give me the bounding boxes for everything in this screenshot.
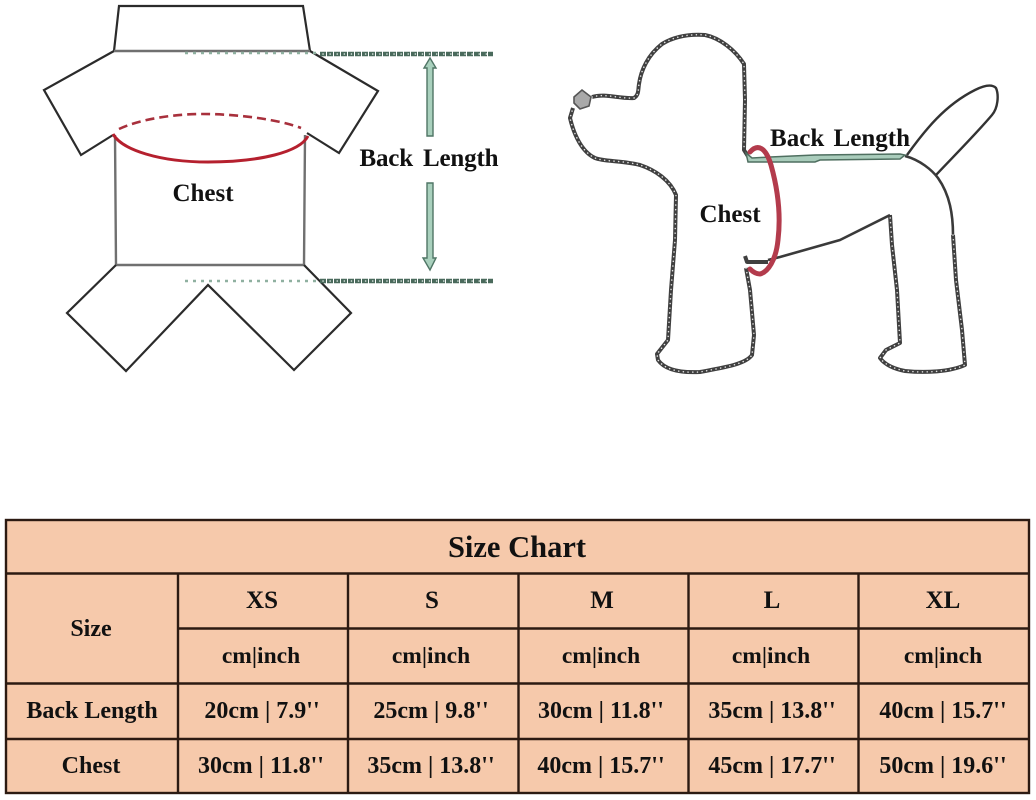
label: back length: Back Length: [360, 145, 499, 172]
row: chest: 45cm | 17.7'': [708, 753, 836, 779]
row header: size: Size: [70, 616, 112, 642]
dog nose: [574, 90, 591, 109]
label: chest: Chest: [699, 201, 761, 228]
row: back length: [26, 698, 1007, 724]
dog outline: [570, 35, 965, 372]
row: units: [222, 643, 982, 669]
garment outline: [44, 6, 378, 371]
row: units: cm|inch: [732, 643, 810, 669]
row: back length: 30cm | 11.8'': [538, 698, 664, 724]
row: chest: 30cm | 11.8'': [198, 753, 324, 779]
row: sizes: M: [590, 587, 614, 614]
row: units: cm|inch: [562, 643, 640, 669]
panel: garment diagram: [44, 6, 499, 371]
size chart table: [6, 520, 1029, 793]
row: sizes: XS: [246, 587, 278, 614]
row: sizes: XL: [926, 587, 960, 614]
chest measurement loop: [113, 114, 308, 162]
row: back length: 25cm | 9.8'': [373, 698, 489, 724]
table title: Size Chart: [448, 530, 587, 564]
arrow: back length up: [424, 58, 436, 136]
table grid: [6, 573, 1029, 793]
row: back length: 40cm | 15.7'': [879, 698, 1007, 724]
row: sizes: L: [764, 587, 780, 614]
row: sizes: [246, 587, 960, 614]
row: back length: 35cm | 13.8'': [708, 698, 836, 724]
row: units: cm|inch: [392, 643, 470, 669]
dog tail: [907, 86, 998, 175]
row: chest: 35cm | 13.8'': [367, 753, 495, 779]
panel: dog diagram: [570, 35, 998, 372]
arrow: back length down: [423, 183, 436, 270]
row: chest: Chest: [62, 753, 120, 779]
row: chest: 40cm | 15.7'': [537, 753, 665, 779]
chest strap: [750, 148, 779, 274]
row: chest: [62, 753, 1007, 779]
row: sizes: S: [425, 587, 439, 614]
row: back length: Back Length: [26, 698, 158, 724]
row: units: cm|inch: [904, 643, 982, 669]
row: units: cm|inch: [222, 643, 300, 669]
back length guide lines: [185, 53, 493, 281]
back length bar: [746, 153, 905, 162]
table background: [6, 520, 1029, 793]
label: chest: Chest: [172, 180, 234, 207]
row: back length: 20cm | 7.9'': [204, 698, 320, 724]
row: chest: 50cm | 19.6'': [879, 753, 1007, 779]
label: back length: Back Length: [770, 125, 910, 152]
